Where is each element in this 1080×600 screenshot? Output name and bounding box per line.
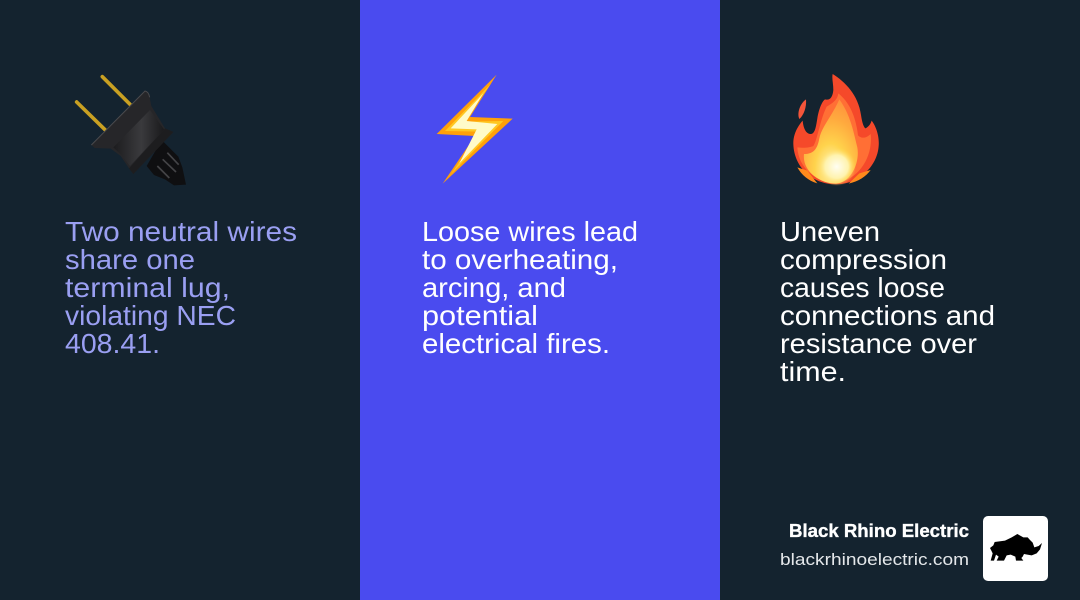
icon: electric plug — [77, 77, 186, 185]
text: compression description: compression — [780, 244, 947, 275]
text: compression description: Uneven — [780, 216, 880, 247]
text: compression description: resistance over — [780, 328, 977, 359]
panel: left background — [0, 0, 360, 600]
text: plug description — [65, 216, 297, 359]
footer website: blackrhinoelectric.com — [780, 550, 969, 569]
text: plug description: Two neutral wires — [65, 216, 297, 247]
logo: rhino on white tile — [983, 516, 1048, 581]
text: compression description — [780, 216, 995, 387]
panel: middle background — [360, 0, 720, 600]
footer brand name: Black Rhino Electric — [789, 521, 969, 541]
text: overheating description: Loose wires lead — [422, 216, 638, 247]
icon: flame — [793, 74, 879, 186]
text: plug description: violating NEC — [65, 300, 236, 331]
text: plug description: 408.41. — [65, 328, 160, 359]
panel: right background — [720, 0, 1080, 600]
text: overheating description: electrical fires. — [422, 328, 610, 359]
text: compression description: connections and — [780, 300, 995, 331]
text: overheating description: arcing, and — [422, 272, 566, 303]
text: plug description: terminal lug, — [65, 272, 230, 303]
text: overheating description: potential — [422, 300, 538, 331]
text: overheating description: to overheating, — [422, 244, 618, 275]
text: compression description: causes loose — [780, 272, 945, 303]
text: compression description: time. — [780, 356, 846, 387]
text: overheating description — [422, 216, 638, 359]
icon: lightning bolt — [437, 75, 513, 184]
text: plug description: share one — [65, 244, 195, 275]
